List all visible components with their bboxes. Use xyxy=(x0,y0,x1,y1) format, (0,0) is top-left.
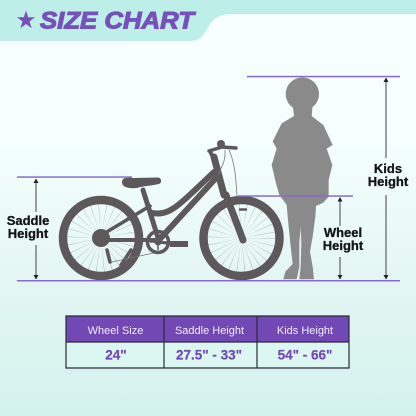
values: 24" xyxy=(105,348,127,362)
saddle xyxy=(122,178,161,188)
values xyxy=(105,348,332,362)
front wheel xyxy=(204,200,280,276)
kids height top line xyxy=(247,76,400,77)
saddle height dimension xyxy=(7,178,49,280)
wheel height dimension xyxy=(323,197,364,280)
size table xyxy=(66,316,349,368)
frame xyxy=(105,147,246,265)
header labels xyxy=(88,325,333,337)
wheel height label: Height xyxy=(323,238,364,253)
chainring xyxy=(148,232,168,252)
kids height label: Height xyxy=(368,174,409,189)
table header xyxy=(66,316,349,342)
values: 27.5" - 33" xyxy=(176,348,242,362)
table body xyxy=(66,342,349,368)
values: 54" - 66" xyxy=(278,348,332,362)
arrow up xyxy=(34,178,38,212)
rear wheel xyxy=(63,200,139,276)
header labels: Saddle Height xyxy=(175,325,244,337)
arrow down xyxy=(34,245,38,280)
arrow up xyxy=(384,78,388,158)
arrow down xyxy=(384,195,388,280)
icon: star xyxy=(17,10,35,28)
kid silhouette xyxy=(272,77,333,279)
header labels: Kids Height xyxy=(277,325,333,337)
header labels: Wheel Size xyxy=(88,325,143,337)
title xyxy=(17,8,196,34)
handlebar clamp xyxy=(217,140,225,148)
saddle height label: Height xyxy=(8,226,49,241)
wheel height line xyxy=(238,195,353,197)
header band xyxy=(0,0,416,41)
saddle guide lines xyxy=(17,176,400,282)
kids height label: Kids xyxy=(374,161,402,176)
heading text: SIZE CHART xyxy=(40,8,196,34)
wheel height label: Wheel xyxy=(324,225,362,240)
table borders xyxy=(66,316,349,368)
bicycle xyxy=(63,140,280,276)
saddle height label: Saddle xyxy=(7,213,49,228)
kids height dimension xyxy=(368,78,409,280)
arrow up xyxy=(338,197,342,226)
arrow down xyxy=(338,257,342,280)
pedal xyxy=(170,241,188,247)
